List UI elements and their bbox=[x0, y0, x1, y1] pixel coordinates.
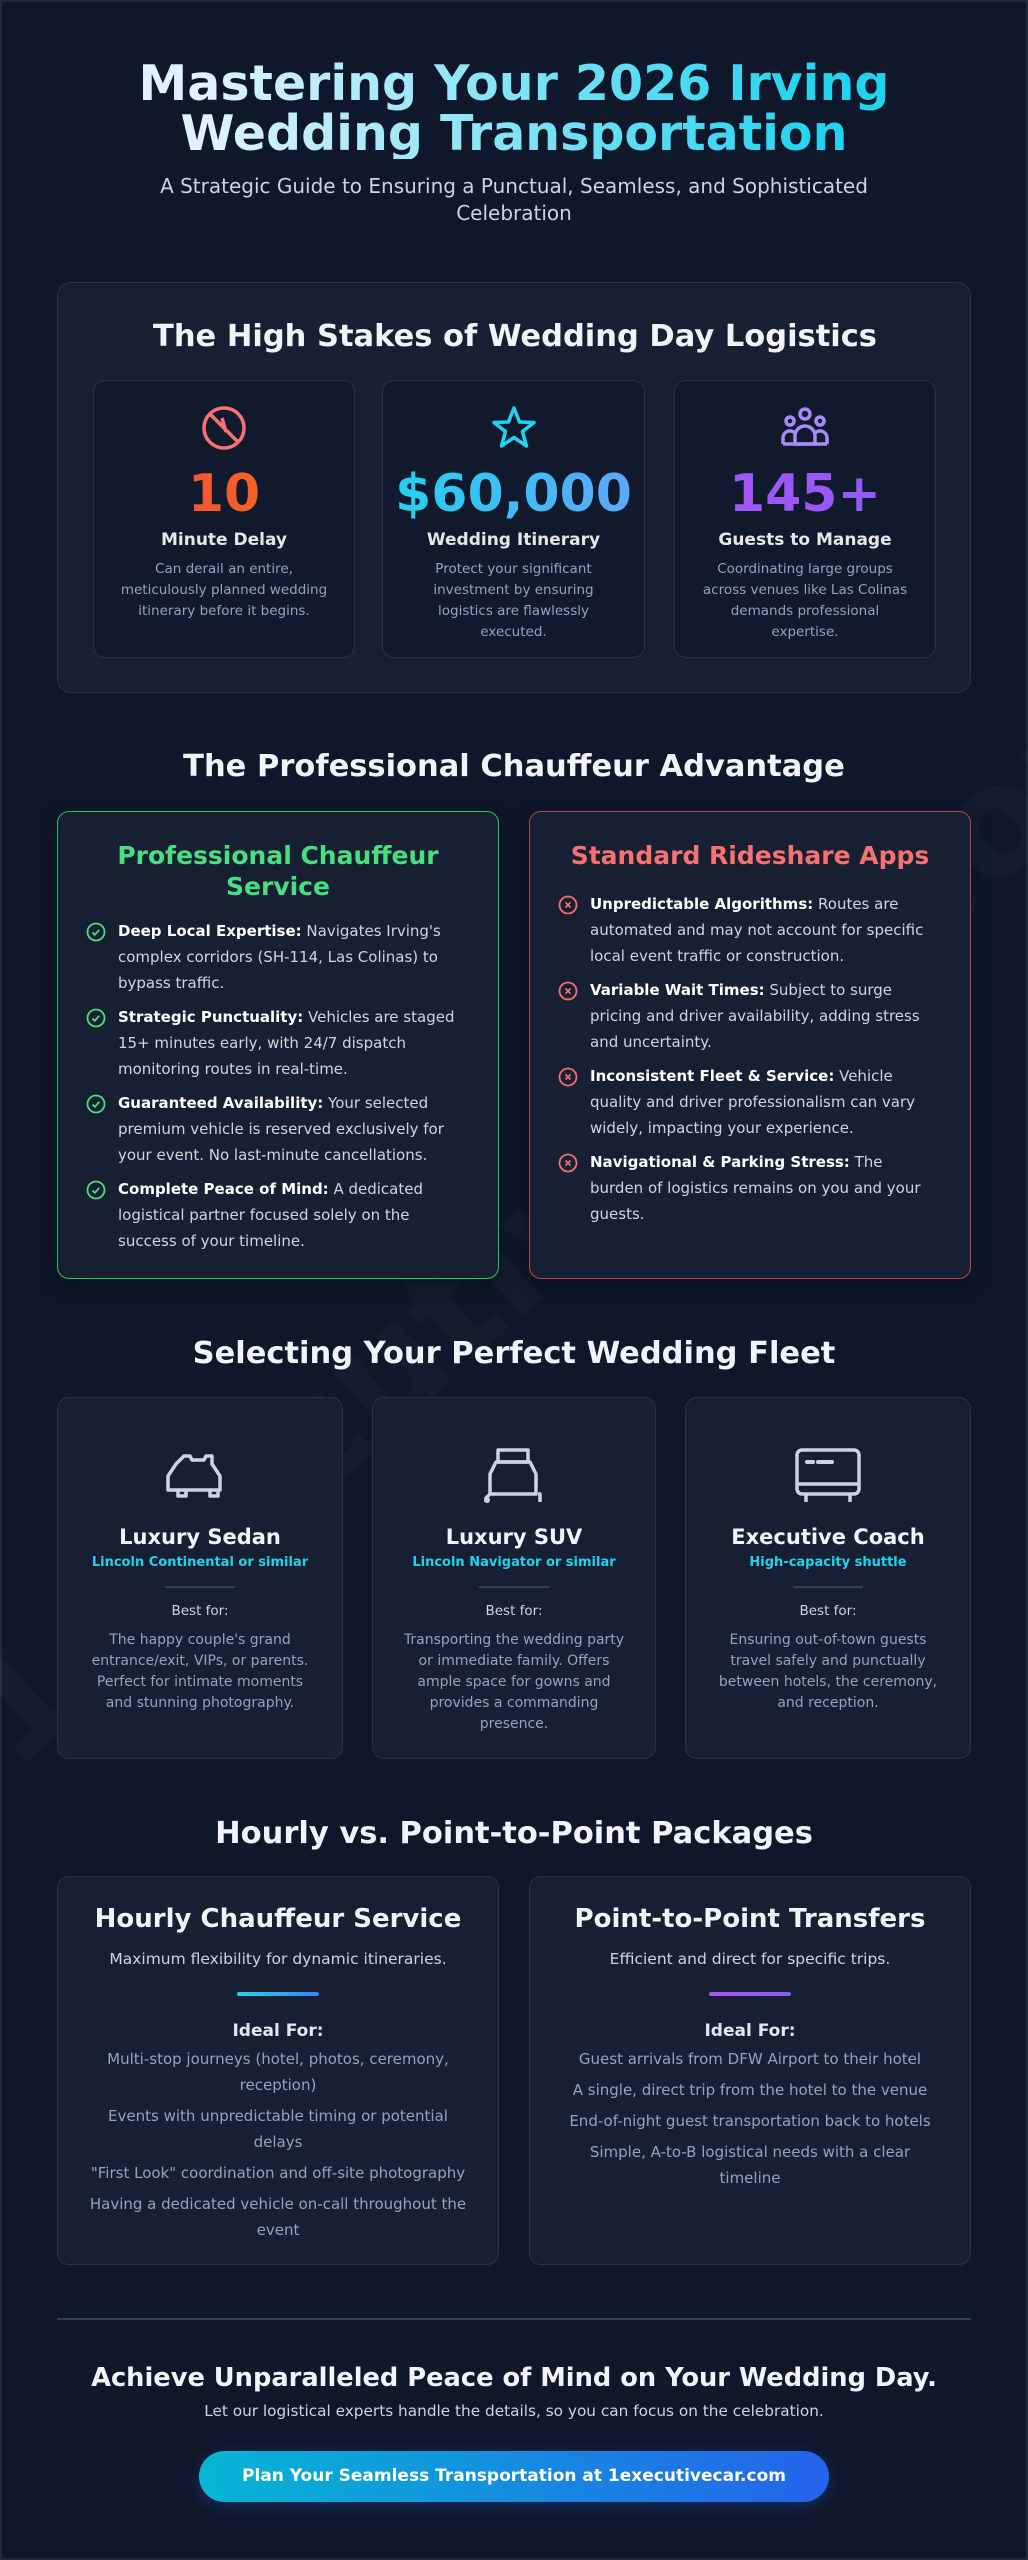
panel: high stakes bbox=[57, 282, 971, 693]
card: 145+ guests: Guests to Manage bbox=[718, 530, 892, 550]
list: rideshare drawbacks: Variable Wait Times: Subject to surge pricing and driver availability, adding stress and uncertainty. bbox=[590, 981, 920, 1051]
card: luxury sedan: Lincoln Continental or similar bbox=[92, 1555, 308, 1570]
card: hourly service: Hourly Chauffeur Service bbox=[95, 1904, 461, 1934]
panel: rideshare apps bbox=[529, 811, 971, 1279]
list: hourly ideal for: "First Look" coordination and off-site photography bbox=[91, 2164, 465, 2182]
list: chauffeur benefits: Guaranteed Availability: Your selected premium vehicle is reserved exclusively for your event. No last-minute cancellations. bbox=[118, 1094, 444, 1164]
card: luxury sedan: Best for: bbox=[171, 1603, 229, 1619]
card: luxury suv bbox=[372, 1397, 656, 1759]
title: Mastering Your 2026 Irving bbox=[139, 55, 889, 112]
card: point-to-point: Point-to-Point Transfers bbox=[575, 1904, 925, 1934]
panel: professional chauffeur bbox=[57, 811, 499, 1279]
card: executive coach: Best for: bbox=[799, 1603, 857, 1619]
icon: star bbox=[492, 406, 536, 448]
list: hourly ideal for: Having a dedicated vehicle on-call throughout the event bbox=[90, 2195, 466, 2239]
card: $60,000: Wedding Itinerary bbox=[427, 530, 600, 550]
card: luxury sedan bbox=[57, 1397, 343, 1759]
list: chauffeur benefits: Deep Local Expertise: Navigates Irving's complex corridors (SH-114, Las Colinas) to bypass traffic. bbox=[118, 922, 441, 992]
heading: packages: Hourly vs. Point-to-Point Packages bbox=[215, 1816, 813, 1851]
card: 10 minute delay: Can derail an entire, meticulously planned wedding itinerary before it begins. bbox=[121, 561, 327, 619]
list: p2p ideal for bbox=[569, 2050, 931, 2187]
heading: chauffeur advantage: The Professional Chauffeur Advantage bbox=[183, 749, 845, 784]
card: 10 minute delay bbox=[93, 380, 355, 658]
list: chauffeur benefits: Strategic Punctuality: Vehicles are staged 15+ minutes early, with 24/7 dispatch monitoring routes in real-time. bbox=[118, 1008, 454, 1078]
heading: fleet: Selecting Your Perfect Wedding Fleet bbox=[193, 1336, 835, 1371]
icon: coach bbox=[795, 1448, 861, 1502]
list: p2p ideal for: A single, direct trip from the hotel to the venue bbox=[573, 2081, 927, 2099]
card: point-to-point bbox=[529, 1876, 971, 2265]
list: rideshare drawbacks: Navigational & Parking Stress: The bbox=[590, 1153, 882, 1171]
list: p2p ideal for: End-of-night guest transportation back to hotels bbox=[569, 2112, 931, 2130]
card: luxury suv: Best for: bbox=[485, 1603, 543, 1619]
title bbox=[0, 59, 1028, 159]
icon: group bbox=[781, 407, 829, 446]
heading: high stakes: The High Stakes of Wedding Day Logistics bbox=[153, 319, 877, 354]
CTA heading: Achieve Unparalleled Peace of Mind on Your Wedding Day. bbox=[91, 2363, 937, 2393]
icon: sedan bbox=[166, 1454, 222, 1498]
list: p2p ideal for: Simple, A-to-B logistical needs with a clear timeline bbox=[590, 2143, 910, 2187]
heading: rideshare: Standard Rideshare Apps bbox=[571, 841, 929, 870]
list: rideshare drawbacks bbox=[558, 895, 923, 1223]
card: executive coach: Executive Coach bbox=[731, 1525, 925, 1549]
list: hourly ideal for bbox=[90, 2050, 466, 2239]
card: point-to-point: Ideal For: bbox=[704, 2021, 796, 2041]
card: $60,000 bbox=[382, 380, 645, 658]
subtitle: A Strategic Guide to Ensuring a Punctual, Seamless, and Sophisticated Celebration bbox=[160, 174, 868, 225]
list: rideshare drawbacks: Inconsistent Fleet & Service: Vehicle quality and driver professionalism can vary widely, impacting your experience. bbox=[590, 1067, 915, 1137]
list: rideshare drawbacks: burden of logistics remains on you and your guests. bbox=[590, 1179, 921, 1223]
card: point-to-point: Efficient and direct for specific trips. bbox=[610, 1950, 890, 1968]
card: luxury suv: Transporting the wedding party or immediate family. Offers ample space for gowns and provides a commanding presence. bbox=[404, 1632, 624, 1732]
icon: suv bbox=[484, 1448, 542, 1503]
card: hourly service bbox=[57, 1876, 499, 2265]
heading: professional chauffeur: Professional Chauffeur Service bbox=[117, 841, 439, 901]
card: 10 minute delay: Minute Delay bbox=[161, 530, 287, 550]
card: executive coach: Ensuring out-of-town guests travel safely and punctually between hotels, the ceremony, and reception. bbox=[719, 1632, 937, 1711]
card: hourly service: Maximum flexibility for dynamic itineraries. bbox=[109, 1950, 447, 1968]
card: $60,000: Protect your significant investment by ensuring logistics are flawlessly executed. bbox=[433, 561, 594, 640]
card: 10 minute delay: 10 bbox=[188, 464, 260, 524]
CTA button bbox=[199, 2451, 829, 2502]
card: 145+ guests: Coordinating large groups across venues like Las Colinas demands professional expertise. bbox=[703, 561, 907, 640]
card: luxury suv: Lincoln Navigator or similar bbox=[412, 1555, 616, 1570]
icon: no clock bbox=[202, 406, 246, 450]
card: $60,000: $60,000 bbox=[395, 464, 632, 524]
card: executive coach bbox=[685, 1397, 971, 1759]
list: hourly ideal for: Multi-stop journeys (hotel, photos, ceremony, reception) bbox=[107, 2050, 449, 2094]
card: 145+ guests bbox=[674, 380, 936, 658]
list: rideshare drawbacks: Unpredictable Algorithms: Routes are automated and may not account for specific local event traffic or construction. bbox=[590, 895, 923, 965]
CTA button: Plan Your Seamless Transportation at 1executivecar.com bbox=[242, 2466, 786, 2486]
card: hourly service: Ideal For: bbox=[232, 2021, 324, 2041]
list: hourly ideal for: Events with unpredictable timing or potential delays bbox=[108, 2107, 448, 2151]
card: 145+ guests: 145+ bbox=[729, 464, 881, 524]
card: luxury sedan: Luxury Sedan bbox=[119, 1525, 281, 1549]
card: executive coach: High-capacity shuttle bbox=[749, 1555, 907, 1570]
card: luxury sedan: The happy couple's grand entrance/exit, VIPs, or parents. Perfect for intimate moments and stunning photography. bbox=[92, 1632, 308, 1711]
list: chauffeur benefits: Complete Peace of Mind: A dedicated logistical partner focused solely on the success of your timeline. bbox=[118, 1180, 423, 1250]
CTA subtext: Let our logistical experts handle the details, so you can focus on the celebration. bbox=[204, 2402, 824, 2420]
card: luxury suv: Luxury SUV bbox=[446, 1525, 582, 1549]
title: Wedding Transportation bbox=[180, 105, 847, 162]
list: p2p ideal for: Guest arrivals from DFW Airport to their hotel bbox=[579, 2050, 921, 2068]
list: chauffeur benefits bbox=[86, 922, 454, 1250]
